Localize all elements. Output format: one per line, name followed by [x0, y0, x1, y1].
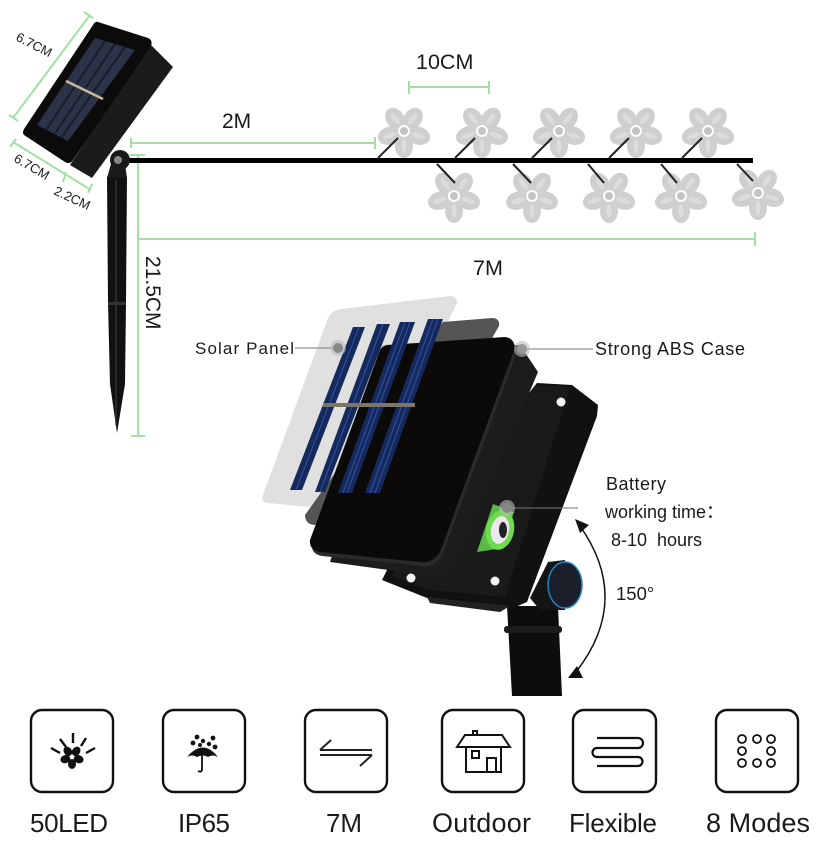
screw holes — [406, 398, 566, 586]
battery — [477, 504, 518, 552]
feature icon: 7M — [305, 710, 387, 838]
label: 150 degrees: 150° — [616, 583, 654, 604]
stake large — [504, 606, 562, 696]
dimension labels: 21.5CM — [141, 256, 164, 330]
feature icon: IP65 — [163, 710, 245, 838]
feature icon: flexible — [569, 710, 657, 838]
dimension labels: 6.7CM — [14, 29, 55, 60]
strip connector — [323, 403, 415, 407]
feature icon: outdoor — [432, 710, 531, 838]
dimension labels — [12, 29, 503, 330]
grey sheet — [262, 296, 457, 507]
dimension labels: 10CM — [416, 50, 473, 74]
dimension labels: 6.7CM — [12, 151, 52, 183]
callout: solar panel — [195, 339, 346, 358]
small solar panel — [23, 22, 173, 178]
plate rim — [312, 341, 517, 566]
front black plate — [310, 337, 515, 562]
rotation knob — [530, 560, 582, 610]
feature icon: 8 modes — [706, 710, 810, 838]
flower wires — [378, 138, 753, 183]
stake — [107, 164, 127, 433]
solar strips — [290, 319, 443, 493]
middle case — [330, 345, 538, 577]
callout: battery working time: working time： — [604, 502, 724, 522]
dimension labels: 2.2CM — [52, 183, 93, 213]
feature icon: 50LED: 50LED — [30, 808, 108, 838]
feature icon: 7M: 7M — [326, 808, 362, 838]
feature icon: 50LED — [30, 710, 113, 838]
exploded view of solar unit — [262, 296, 605, 696]
flowers — [376, 104, 786, 223]
dark translucent plate — [305, 318, 499, 525]
feature icon: flexible: Flexible — [569, 808, 657, 838]
callout: strong ABS case — [514, 339, 745, 359]
callout: battery working time: 8-10 hours — [611, 530, 702, 550]
callout: battery working time — [499, 474, 724, 550]
callout: solar panel: Solar Panel — [195, 339, 294, 358]
dimension lines — [9, 12, 755, 436]
back case — [382, 383, 598, 608]
main product diagram: string light — [9, 12, 786, 436]
feature icon: IP65: IP65 — [178, 808, 230, 838]
feature icon: outdoor: Outdoor — [432, 808, 531, 838]
dimension labels: 7M — [473, 256, 503, 280]
callout: battery working time: Battery — [606, 474, 666, 494]
callout: strong ABS case: Strong ABS Case — [595, 339, 745, 359]
feature icon: 8 modes: 8 Modes — [706, 808, 810, 838]
150 degree arrow — [568, 519, 605, 678]
main wire — [125, 158, 753, 163]
dimension labels: 2M — [222, 110, 251, 133]
